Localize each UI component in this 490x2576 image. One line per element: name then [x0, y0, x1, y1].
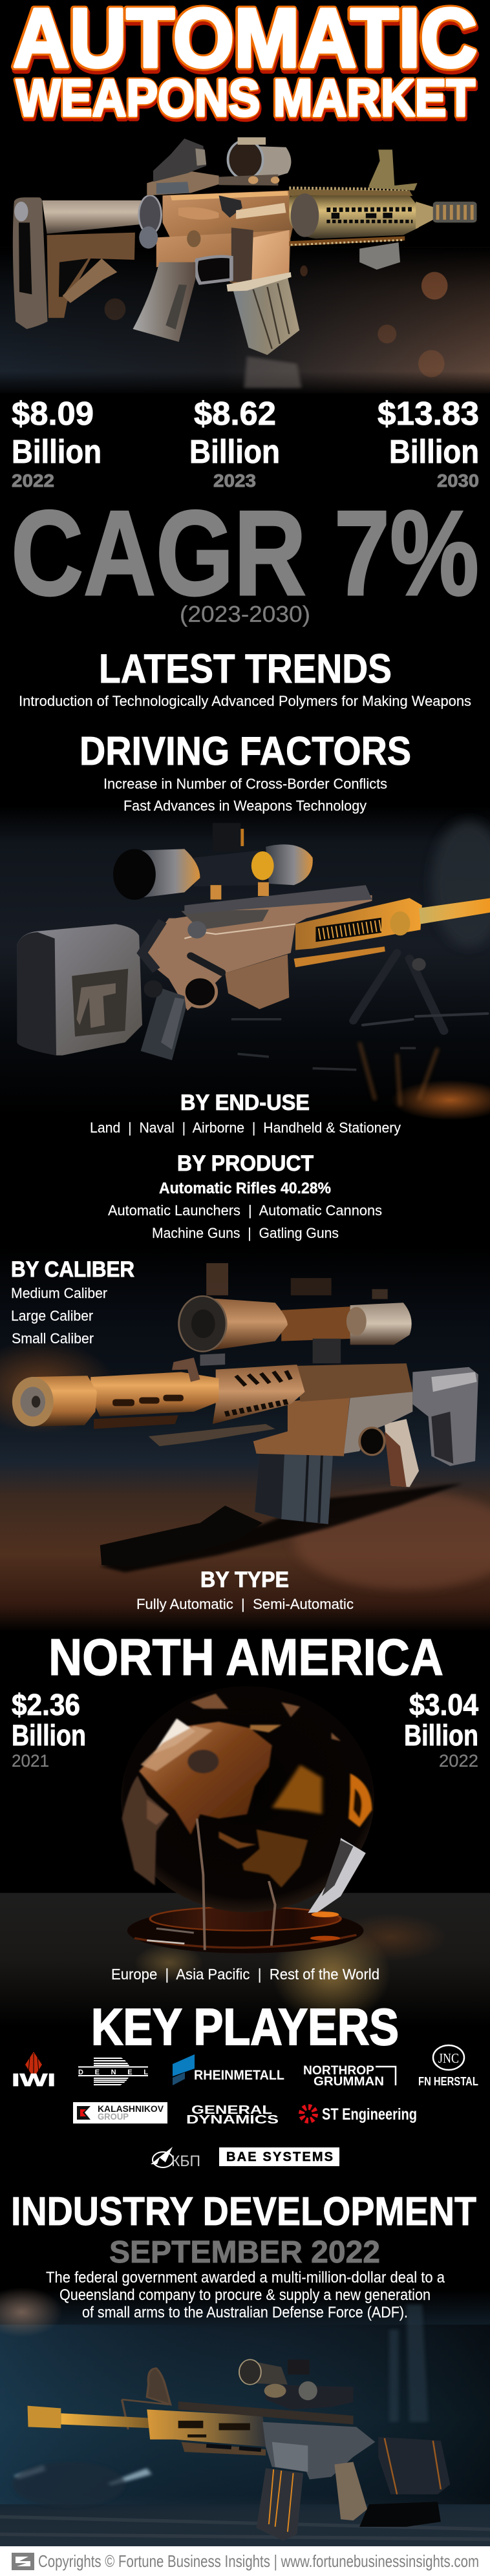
north america 2021 value: Billion	[12, 1719, 86, 1752]
development description: The federal government awarded a multi-million-dollar deal to a	[46, 2269, 445, 2286]
riflescope	[113, 823, 313, 900]
by product: Automatic Launchers | Automatic Cannons	[108, 1202, 382, 1219]
development date: SEPTEMBER 2022	[109, 2235, 380, 2270]
logo: BAE Systems	[219, 2147, 339, 2166]
driving factors	[80, 729, 411, 814]
logo: Denel: DENEL	[78, 2069, 148, 2076]
market size 2022: 2022	[12, 471, 54, 491]
table light glow	[272, 1924, 390, 2023]
latest trends	[19, 646, 471, 709]
barrel	[419, 898, 490, 924]
logo: ST Engineering: ST Engineering	[322, 2105, 417, 2124]
by end-use: BY END-USE	[180, 1091, 310, 1115]
molten drips	[197, 1818, 275, 1950]
upper receiver	[297, 1363, 412, 1401]
other regions: Europe | Asia Pacific | Rest of the World	[111, 1966, 379, 1983]
logo: BAE Systems: BAE SYSTEMS	[226, 2150, 333, 2164]
development description	[46, 2269, 445, 2321]
red-dot optic	[219, 137, 291, 186]
muzzle device	[416, 202, 476, 229]
bipod	[353, 953, 487, 1031]
front sight	[122, 2368, 171, 2429]
hero image: assault rifle	[0, 137, 490, 393]
backdrop	[0, 1246, 490, 1632]
stock	[359, 2437, 450, 2527]
market size 2022	[12, 395, 101, 491]
north america 2022 value: 2022	[439, 1751, 478, 1771]
logo: Rheinmetall	[173, 2054, 284, 2085]
north america heading: NORTH AMERICA	[48, 1628, 443, 1686]
by caliber: BY CALIBER	[11, 1257, 134, 1282]
by product: Automatic Rifles 40.28%	[159, 1180, 331, 1197]
by type: BY TYPE	[200, 1568, 289, 1592]
by caliber: Large Caliber	[11, 1308, 93, 1324]
north america 2022 value	[404, 1688, 478, 1771]
latest trends: LATEST TRENDS	[99, 646, 392, 692]
backdrop	[0, 805, 490, 1120]
upper and lower receiver	[139, 191, 294, 288]
magazine reflection	[244, 356, 302, 388]
handguard	[213, 1365, 305, 1424]
logo: IWI: IWI	[12, 2070, 56, 2090]
grip and lower receiver	[253, 1392, 419, 1487]
buttstock	[17, 924, 142, 1056]
dropped optic on the floor	[100, 1506, 262, 1568]
by caliber: Small Caliber	[12, 1330, 94, 1347]
logo: Denel	[78, 2058, 148, 2085]
logo: General Dynamics: DYNAMICS	[186, 2113, 279, 2126]
rifle chassis	[141, 895, 372, 1010]
logo: Rheinmetall: RHEINMETALL	[194, 2068, 284, 2083]
globe image	[0, 1686, 490, 2027]
front sight post	[172, 1357, 200, 1382]
north america 2022 value: $3.04	[409, 1688, 478, 1721]
CAGR period: (2023-2030)	[180, 602, 310, 627]
blurred backdrop	[0, 2287, 490, 2547]
receiver	[262, 2422, 375, 2479]
continents	[122, 1694, 372, 1888]
trigger guard	[196, 257, 231, 283]
by product	[108, 1151, 382, 1241]
logo: Kalashnikov Group: GROUP	[98, 2111, 129, 2122]
sniper rifle image	[0, 805, 490, 1120]
bokeh lights	[105, 266, 448, 378]
logo: FN Herstal	[418, 2045, 478, 2088]
shoulder stock	[13, 195, 162, 329]
by product: Machine Guns | Gatling Guns	[152, 1225, 339, 1241]
stock	[412, 1367, 478, 1466]
barrel and muzzle	[28, 2406, 153, 2428]
grip and trigger	[141, 921, 222, 1060]
by type: Fully Automatic | Semi-Automatic	[136, 1596, 354, 1612]
foregrip ring	[359, 242, 400, 270]
logo: Northrop Grumman	[303, 2064, 396, 2089]
logo: Northrop Grumman: GRUMMAN	[314, 2075, 384, 2089]
footer bar	[0, 2546, 490, 2576]
development description: of small arms to the Australian Defense Force (ADF).	[82, 2304, 408, 2321]
logo: ST Engineering	[301, 2105, 417, 2124]
logo: FN Herstal: JNC	[438, 2050, 459, 2066]
development description: Queensland company to procure & supply a new generation	[59, 2286, 431, 2304]
driving factors: Fast Advances in Weapons Technology	[123, 798, 367, 814]
logo: Kalashnikov Group: KALASHNIKOV	[98, 2103, 164, 2114]
fore-end with slots	[294, 898, 422, 967]
market size 2023: Billion	[189, 433, 280, 470]
market size 2030: 2030	[437, 471, 479, 491]
front sight	[369, 150, 418, 191]
floor backdrop	[0, 248, 490, 393]
magazine	[257, 2468, 303, 2540]
receiver highlight	[272, 2442, 308, 2472]
magazine	[255, 1451, 333, 1524]
muzzle	[12, 1376, 97, 1427]
market size 2030	[378, 395, 479, 491]
scoped rifle image	[0, 1246, 490, 1632]
north america 2021 value: $2.36	[12, 1688, 80, 1721]
by product: BY PRODUCT	[177, 1151, 314, 1176]
by end-use	[90, 1091, 401, 1136]
glass reflection	[308, 1838, 366, 1913]
logo: IWI	[12, 2052, 56, 2090]
top rail	[178, 2401, 353, 2425]
market size 2023	[189, 395, 280, 491]
market size 2023: 2023	[213, 471, 256, 491]
market size 2022: $8.09	[12, 395, 94, 432]
headline	[12, 0, 478, 130]
optic	[239, 2359, 353, 2409]
magazine	[227, 272, 299, 355]
top rail	[184, 885, 372, 914]
north america 2021 value	[12, 1688, 86, 1771]
latest trends: Introduction of Technologically Advanced Polymers for Making Weapons	[19, 693, 471, 709]
by type	[136, 1568, 354, 1612]
logo: FN Herstal: FN HERSTAL	[418, 2075, 478, 2088]
logo: KBP	[151, 2147, 200, 2170]
handguard	[289, 188, 419, 246]
market size 2023: $8.62	[194, 395, 276, 432]
logo: KBP: КБП	[171, 2153, 200, 2170]
pistol grip	[133, 262, 195, 342]
handguard	[147, 2409, 267, 2456]
rifle scope	[179, 1263, 412, 1366]
market size 2022: Billion	[12, 433, 101, 470]
logo: General Dynamics: GENERAL	[191, 2103, 272, 2116]
glass sphere	[121, 1686, 374, 1912]
globe base	[127, 1907, 363, 1953]
barrel shroud	[91, 1372, 219, 1429]
carbine image	[0, 2287, 490, 2547]
market size 2030: Billion	[389, 433, 479, 470]
market size 2030: $13.83	[378, 395, 479, 432]
floor shadow	[100, 1484, 463, 1572]
logo: General Dynamics	[186, 2103, 279, 2126]
driving factors: DRIVING FACTORS	[80, 729, 411, 774]
driving factors: Increase in Number of Cross-Border Conflicts	[103, 776, 387, 792]
pistol grip	[334, 2462, 367, 2520]
logo: Northrop Grumman: NORTHROP	[303, 2064, 374, 2078]
logo: Kalashnikov Group	[73, 2102, 167, 2124]
table surface	[0, 1893, 490, 2027]
by caliber: Medium Caliber	[11, 1285, 107, 1301]
key players heading: KEY PLAYERS	[91, 1998, 399, 2056]
north america 2021 value: 2021	[12, 1751, 49, 1771]
footer logo	[12, 2553, 34, 2570]
rear sight assembly	[147, 138, 219, 195]
by end-use: Land | Naval | Airborne | Handheld & Stationery	[90, 1120, 401, 1136]
under-rail accessory	[149, 1424, 275, 1446]
by caliber	[11, 1257, 134, 1347]
